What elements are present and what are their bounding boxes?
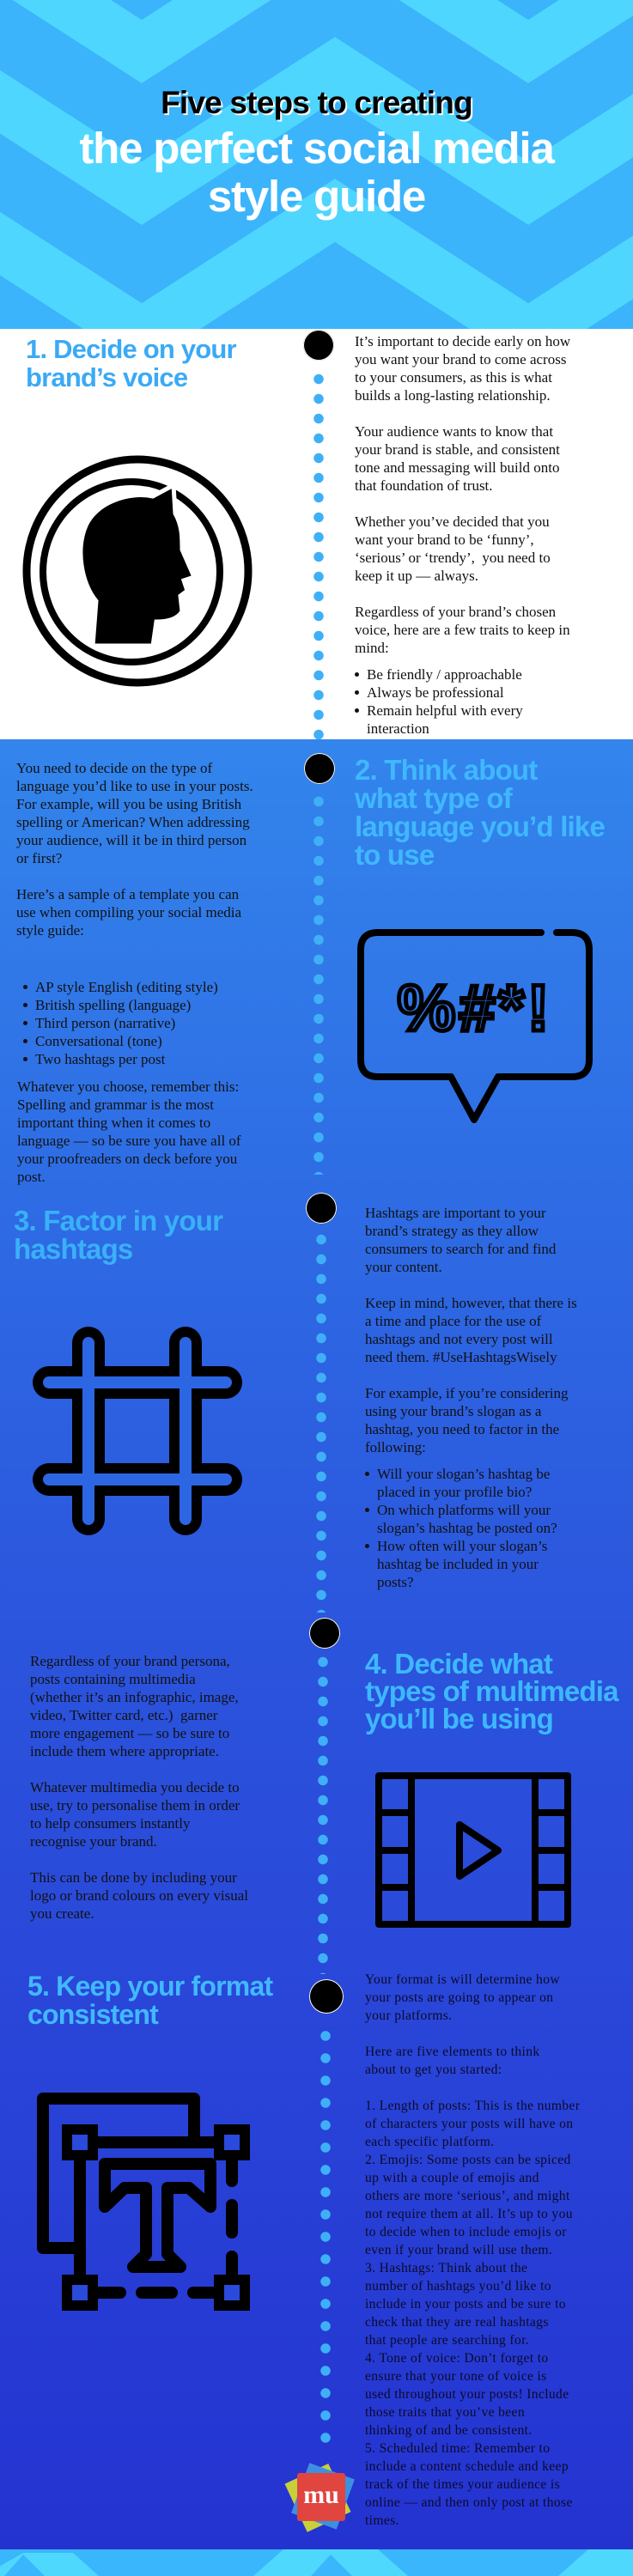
timeline dots 1 <box>313 369 324 744</box>
timeline dots 3 <box>316 1230 326 1613</box>
text: step 1 body: that foundation of trust. <box>355 477 493 494</box>
text: step 1 body: It’s important to decide early on how <box>355 333 570 349</box>
text: step 1 body: builds a long-lasting relationship. <box>355 387 551 404</box>
text: step 2 body: language you’d like to use in your posts. <box>16 778 253 794</box>
text: step 2 body: use when compiling your social media <box>16 904 241 920</box>
text: step 4 body: This can be done by including your <box>30 1869 237 1886</box>
text: step 5 body: check that they are real hashtags <box>365 2315 549 2330</box>
text: step 3 body: Will your slogan’s hashtag be <box>377 1466 550 1482</box>
footer zigzag strip <box>0 2549 633 2576</box>
icon: head in circle <box>22 455 253 687</box>
text: step 1 body <box>355 333 570 737</box>
icon: hashtag <box>33 1327 242 1535</box>
text: step 5 body: include a content schedule and keep <box>365 2459 569 2474</box>
heading: step 4: types of multimedia <box>365 1675 618 1707</box>
text: step 5 body: of characters your posts will have on <box>365 2117 573 2131</box>
text: step 5 body: Here are five elements to think <box>365 2044 540 2059</box>
text: step 5 body: those traits that you’ve been <box>365 2405 525 2420</box>
text: step 2 body: or first? <box>16 850 62 866</box>
text: step 2 body: important thing when it comes to <box>17 1115 210 1131</box>
text: step 1 body: ‘serious’ or ‘trendy’, you need to <box>355 550 551 566</box>
timeline circle 3 <box>306 1193 337 1224</box>
icon: speech bubble with symbols <box>357 929 593 1123</box>
text: step 4 body: you create. <box>30 1905 94 1922</box>
text: step 1 body: voice, here are a few traits to keep in <box>355 622 570 638</box>
title: style guide <box>208 172 425 221</box>
text: step 1 body: your brand is stable, and consistent <box>355 441 560 458</box>
text: step 4 body: (whether it’s an infographic, image, <box>30 1689 239 1705</box>
title: the perfect social media <box>79 124 554 173</box>
text: step 2 body: British spelling (language) <box>35 997 191 1013</box>
text: step 4 body: use, try to personalise them in order <box>30 1797 240 1814</box>
text: step 4 body: Whatever multimedia you decide to <box>30 1779 240 1795</box>
text: step 4 body: posts containing multimedia <box>30 1671 196 1687</box>
heading: step 3 <box>14 1205 223 1265</box>
text: step 5 body: number of hashtags you’d like to <box>365 2279 551 2293</box>
text: step 5 body: about to get you started: <box>365 2063 502 2077</box>
text: step 3 body: slogan’s hashtag be posted on? <box>377 1520 557 1536</box>
icon: mu logo: mu <box>303 2481 339 2509</box>
text: step 5 body: times. <box>365 2513 399 2528</box>
text: step 2 body: Third person (narrative) <box>35 1015 175 1031</box>
text: step 2 body: style guide: <box>16 922 84 939</box>
text: step 1 body: Regardless of your brand’s chosen <box>355 604 556 620</box>
text: step 3 body: How often will your slogan’s <box>377 1538 547 1554</box>
text: step 1 body: Remain helpful with every <box>367 702 523 719</box>
text: step 2 body: Whatever you choose, remember this: <box>17 1078 239 1095</box>
text: step 1 body: tone and messaging will build onto <box>355 459 559 476</box>
text: step 4 body: Regardless of your brand persona, <box>30 1653 230 1669</box>
text: step 5 body: your platforms. <box>365 2008 452 2023</box>
timeline dots 4 <box>318 1652 328 1974</box>
text: step 2 body: For example, will you be using British <box>16 796 241 812</box>
heading: step 2 <box>355 754 605 871</box>
text: step 5 body: others are more ‘serious’, and might <box>365 2189 570 2203</box>
text: step 2 body: AP style English (editing style) <box>35 979 218 995</box>
text: step 5 body: ensure that your tone of voice is <box>365 2369 547 2384</box>
text: step 3 body <box>365 1205 577 1590</box>
text: step 5 body: online — and then only post at those <box>365 2495 573 2510</box>
text: step 5 body: include in your posts and be sure to <box>365 2297 566 2312</box>
icon: film with play <box>375 1772 571 1928</box>
text: step 5 body: Your format is will determine how <box>365 1972 560 1987</box>
text: step 2 body: Two hashtags per post <box>35 1051 165 1067</box>
text: step 3 body: Hashtags are important to your <box>365 1205 546 1221</box>
text: step 1 body: to your consumers, as this is what <box>355 369 552 386</box>
heading: step 5 <box>27 1971 273 2030</box>
text: step 5 body: not require them at all. It’s up to you <box>365 2207 573 2221</box>
icon: text format T <box>37 2093 250 2311</box>
text: step 1 body: want your brand to be ‘funny’, <box>355 532 534 548</box>
text: step 3 body: posts? <box>377 1574 414 1590</box>
heading: step 2: 2. Think about <box>355 754 537 786</box>
text: step 3 body: your content. <box>365 1259 442 1275</box>
text: step 2 body: Here’s a sample of a template you can <box>16 886 239 902</box>
icon: speech bubble with symbols: %#*! <box>398 972 552 1045</box>
text: step 5 body <box>365 1972 580 2528</box>
text: step 2 body: post. <box>17 1169 46 1185</box>
heading: step 5: 5. Keep your format <box>27 1971 272 2002</box>
text: step 5 body: used throughout your posts! Include <box>365 2387 569 2402</box>
header background <box>0 0 633 329</box>
heading: step 4: you’ll be using <box>365 1703 553 1735</box>
panel: sections 2-5 background <box>0 739 633 2549</box>
icon: mu logo <box>285 2463 355 2532</box>
text: step 5 body: 4. Tone of voice: Don’t forget to <box>365 2351 549 2366</box>
text: step 4 body: recognise your brand. <box>30 1833 157 1850</box>
text: step 1 body: interaction <box>367 720 429 737</box>
title: Five steps to creating <box>161 85 472 120</box>
text: step 4 body: to help consumers instantly <box>30 1815 191 1832</box>
text: step 2 body: Spelling and grammar is the most <box>17 1097 214 1113</box>
text: step 2 body: spelling or American? When addressing <box>16 814 250 830</box>
heading: step 4: 4. Decide what <box>365 1648 552 1680</box>
timeline circle 1 <box>303 330 334 361</box>
text: step 5 body: 5. Scheduled time: Remember to <box>365 2441 550 2456</box>
text: step 3 body: consumers to search for and find <box>365 1241 556 1257</box>
text: step 5 body: up with a couple of emojis and <box>365 2171 539 2185</box>
text: step 4 body: logo or brand colours on every visual <box>30 1887 248 1904</box>
heading: step 2: what type of <box>355 782 512 814</box>
text: step 2 body: language — so be sure you have all of <box>17 1133 241 1149</box>
text: step 3 body: hashtag be included in your <box>377 1556 539 1572</box>
heading: step 1 <box>26 334 237 392</box>
heading: step 3: hashtags <box>14 1233 132 1265</box>
text: step 2 body: your audience, will it be in third person <box>16 832 247 848</box>
heading: step 2: language you’d like <box>355 811 605 842</box>
text: step 5 body: your posts are going to appear on <box>365 1990 553 2005</box>
text: step 3 body: need them. #UseHashtagsWisely <box>365 1349 557 1365</box>
text: step 5 body: 1. Length of posts: This is the number <box>365 2099 580 2113</box>
heading: step 1: brand’s voice <box>26 362 187 392</box>
text: step 4 body: more engagement — so be sure to <box>30 1725 229 1741</box>
text: step 1 body: Your audience wants to know that <box>355 423 553 440</box>
timeline dots 5 <box>320 2025 331 2449</box>
text: step 3 body: For example, if you’re considering <box>365 1385 569 1401</box>
text: step 2 body <box>16 760 253 1185</box>
text: step 1 body: Always be professional <box>367 684 504 701</box>
text: step 2 body: Conversational (tone) <box>35 1033 162 1049</box>
timeline circle 4 <box>309 1618 340 1649</box>
text: step 5 body: 3. Hashtags: Think about the <box>365 2261 527 2275</box>
text: step 5 body: 2. Emojis: Some posts can be spiced <box>365 2153 571 2167</box>
text: step 3 body: On which platforms will your <box>377 1502 551 1518</box>
text: step 3 body: placed in your profile bio? <box>377 1484 532 1500</box>
text: step 3 body: following: <box>365 1439 426 1455</box>
heading: step 1: 1. Decide on your <box>26 334 236 364</box>
text: step 1 body: Whether you’ve decided that you <box>355 513 550 530</box>
text: step 4 body: include them where appropriate. <box>30 1743 219 1759</box>
heading: step 4 <box>365 1648 619 1735</box>
text: step 5 body: even if your brand will use them. <box>365 2243 552 2257</box>
text: step 1 body: mind: <box>355 640 389 656</box>
text: step 1 body: Be friendly / approachable <box>367 666 522 683</box>
text: step 2 body: You need to decide on the type of <box>16 760 212 776</box>
text: step 1 body: keep it up — always. <box>355 568 478 584</box>
text: step 5 body: each specific platform. <box>365 2135 495 2149</box>
timeline circle 2 <box>304 753 335 784</box>
text: step 5 body: to decide when to include emojis or <box>365 2225 567 2239</box>
text: step 4 body <box>30 1653 248 1922</box>
text: step 5 body: thinking of and be consistent. <box>365 2423 533 2438</box>
text: step 2 body: your proofreaders on deck before you <box>17 1151 237 1167</box>
text: step 3 body: brand’s strategy as they allow <box>365 1223 539 1239</box>
text: step 1 body: you want your brand to come across <box>355 351 566 368</box>
text: step 5 body: that people are searching for. <box>365 2333 529 2348</box>
timeline dots 2 <box>313 792 324 1175</box>
text: step 4 body: video, Twitter card, etc.) garner <box>30 1707 217 1723</box>
heading: step 5: consistent <box>27 1999 158 2030</box>
heading: step 3: 3. Factor in your <box>14 1205 222 1236</box>
text: step 3 body: a time and place for the use of <box>365 1313 541 1329</box>
text: step 3 body: Keep in mind, however, that there is <box>365 1295 577 1311</box>
text: step 3 body: using your brand’s slogan as a <box>365 1403 541 1419</box>
panel: section 1 background <box>0 329 633 739</box>
text: step 3 body: hashtags and not every post will <box>365 1331 553 1347</box>
text: step 5 body: track of the times your audience is <box>365 2477 560 2492</box>
heading: step 2: to use <box>355 839 434 871</box>
text: step 3 body: hashtag, you need to factor in the <box>365 1421 559 1437</box>
timeline circle 5 <box>309 1979 344 2014</box>
title <box>79 85 555 221</box>
